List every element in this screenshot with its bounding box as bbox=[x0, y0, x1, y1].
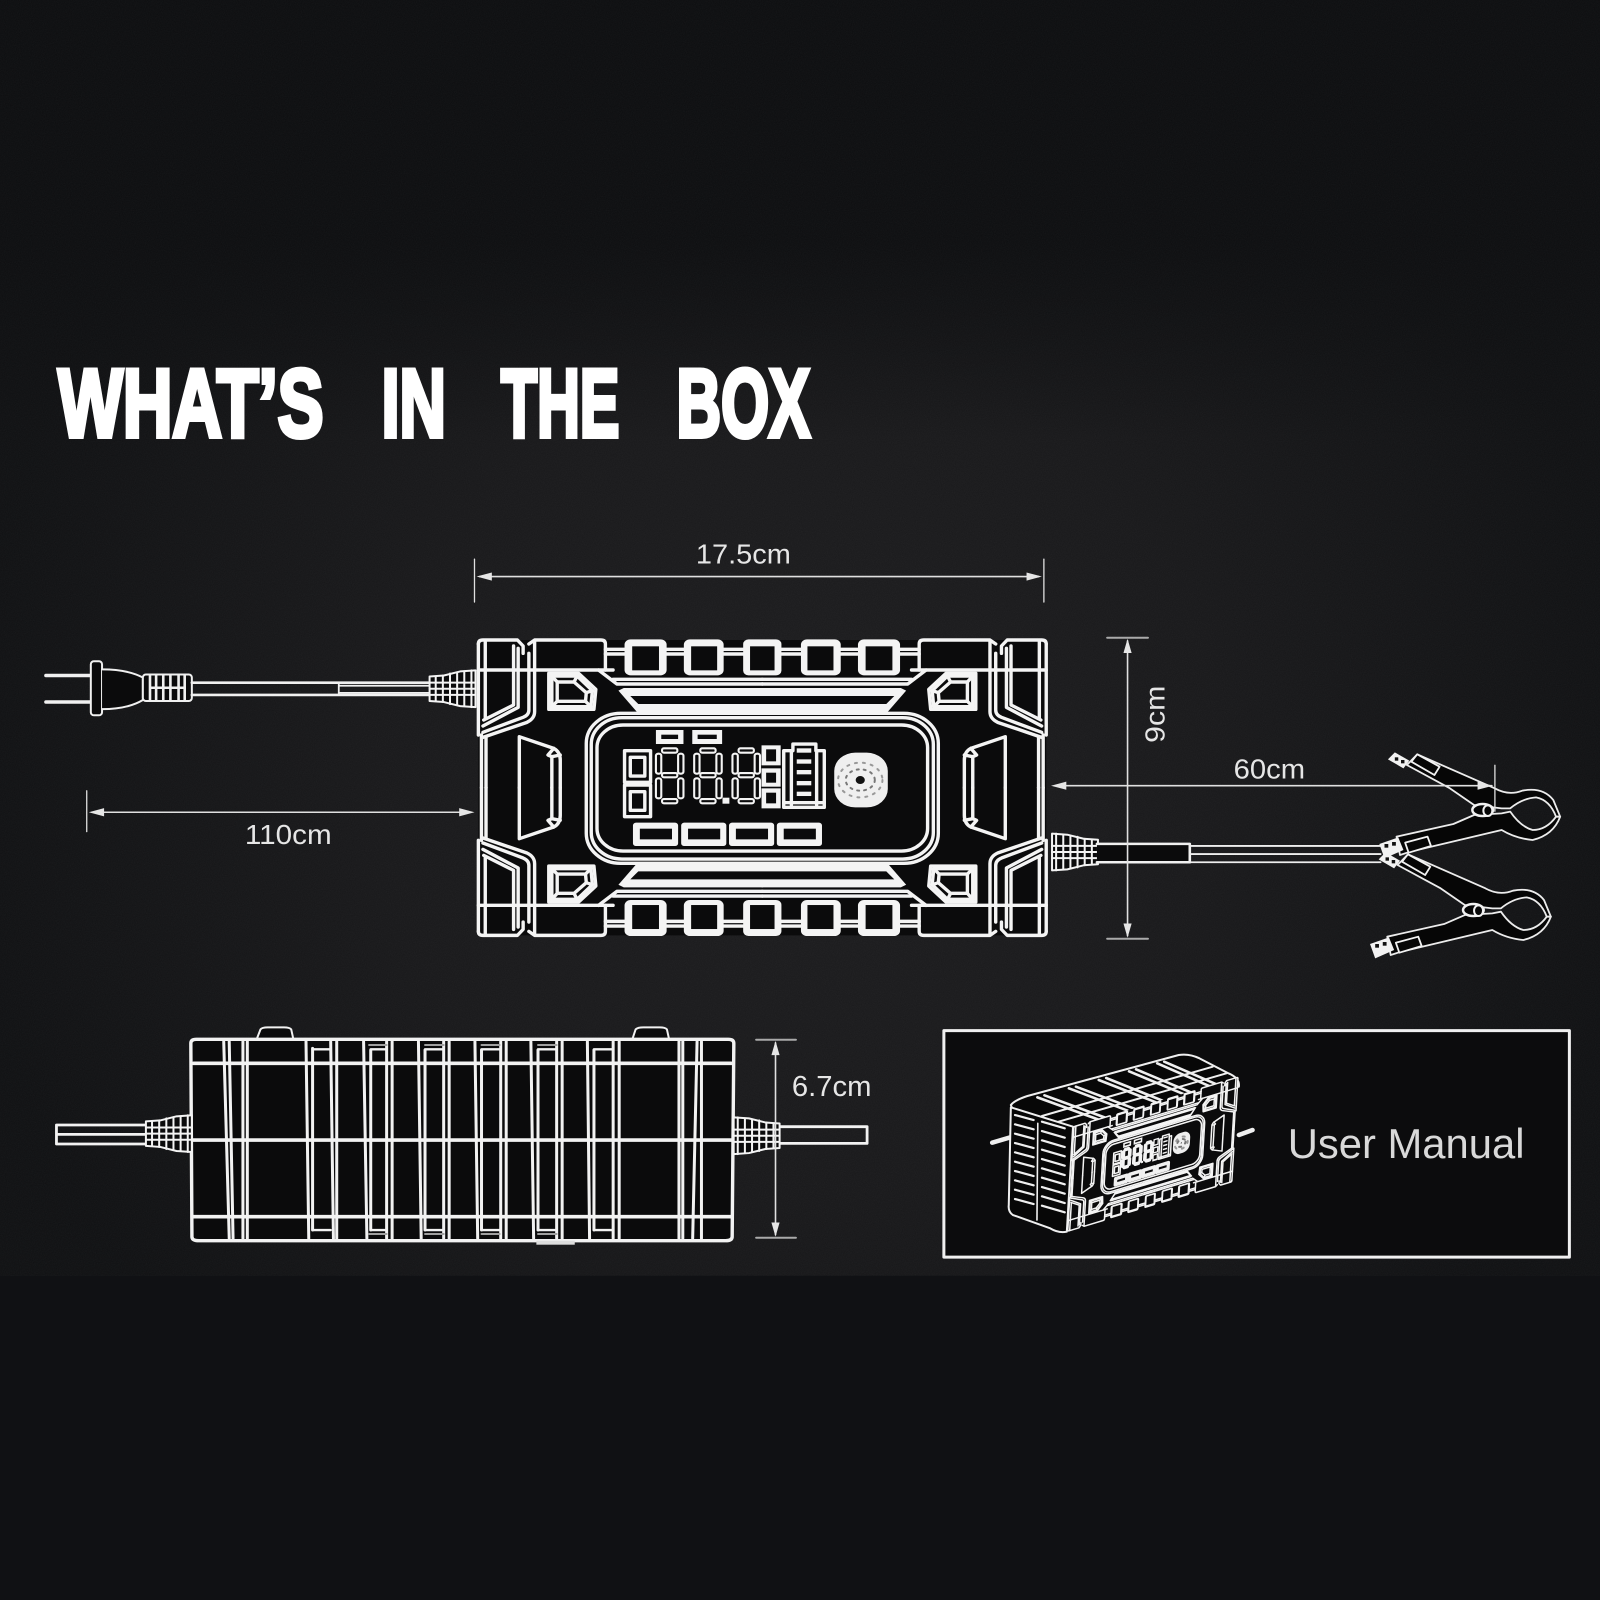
display indicators bbox=[625, 730, 824, 817]
title bbox=[58, 349, 810, 458]
dimension: cable 110cm: 110cm bbox=[245, 819, 332, 850]
dimension: lead 60cm: 60cm bbox=[1234, 754, 1305, 785]
dimension: depth 6.7cm: 6.7cm bbox=[792, 1071, 871, 1103]
display speaker button bbox=[834, 753, 888, 807]
dimension: depth 6.7cm bbox=[756, 1040, 871, 1238]
charger front view bbox=[478, 639, 1046, 936]
label: user manual: User Manual bbox=[1288, 1120, 1524, 1167]
battery clamps bbox=[1370, 752, 1560, 958]
title: BOX bbox=[677, 349, 810, 458]
dimension: width 17.5cm: 17.5cm bbox=[696, 538, 791, 569]
plug cable boot bbox=[430, 670, 476, 707]
centre ribs and grips bbox=[630, 639, 894, 936]
title: IN bbox=[382, 349, 446, 458]
charger side view bbox=[56, 1027, 867, 1245]
dimension: lead 60cm bbox=[1051, 754, 1495, 811]
title: THE bbox=[501, 349, 619, 458]
panel: user manual bbox=[944, 1031, 1569, 1257]
dimension: width 17.5cm bbox=[474, 538, 1044, 602]
title: WHAT’S bbox=[58, 349, 323, 458]
display bezel bbox=[586, 713, 938, 863]
mains plug and cable bbox=[46, 661, 431, 715]
icon: charger isometric bbox=[992, 1055, 1253, 1232]
dimension: cable 110cm bbox=[87, 791, 474, 850]
dimension: height 9cm bbox=[1107, 638, 1170, 939]
output cable and boot bbox=[1052, 834, 1381, 870]
display buttons bbox=[633, 823, 822, 846]
dimension: height 9cm: 9cm bbox=[1139, 686, 1170, 743]
side view cable boots bbox=[146, 1115, 780, 1154]
